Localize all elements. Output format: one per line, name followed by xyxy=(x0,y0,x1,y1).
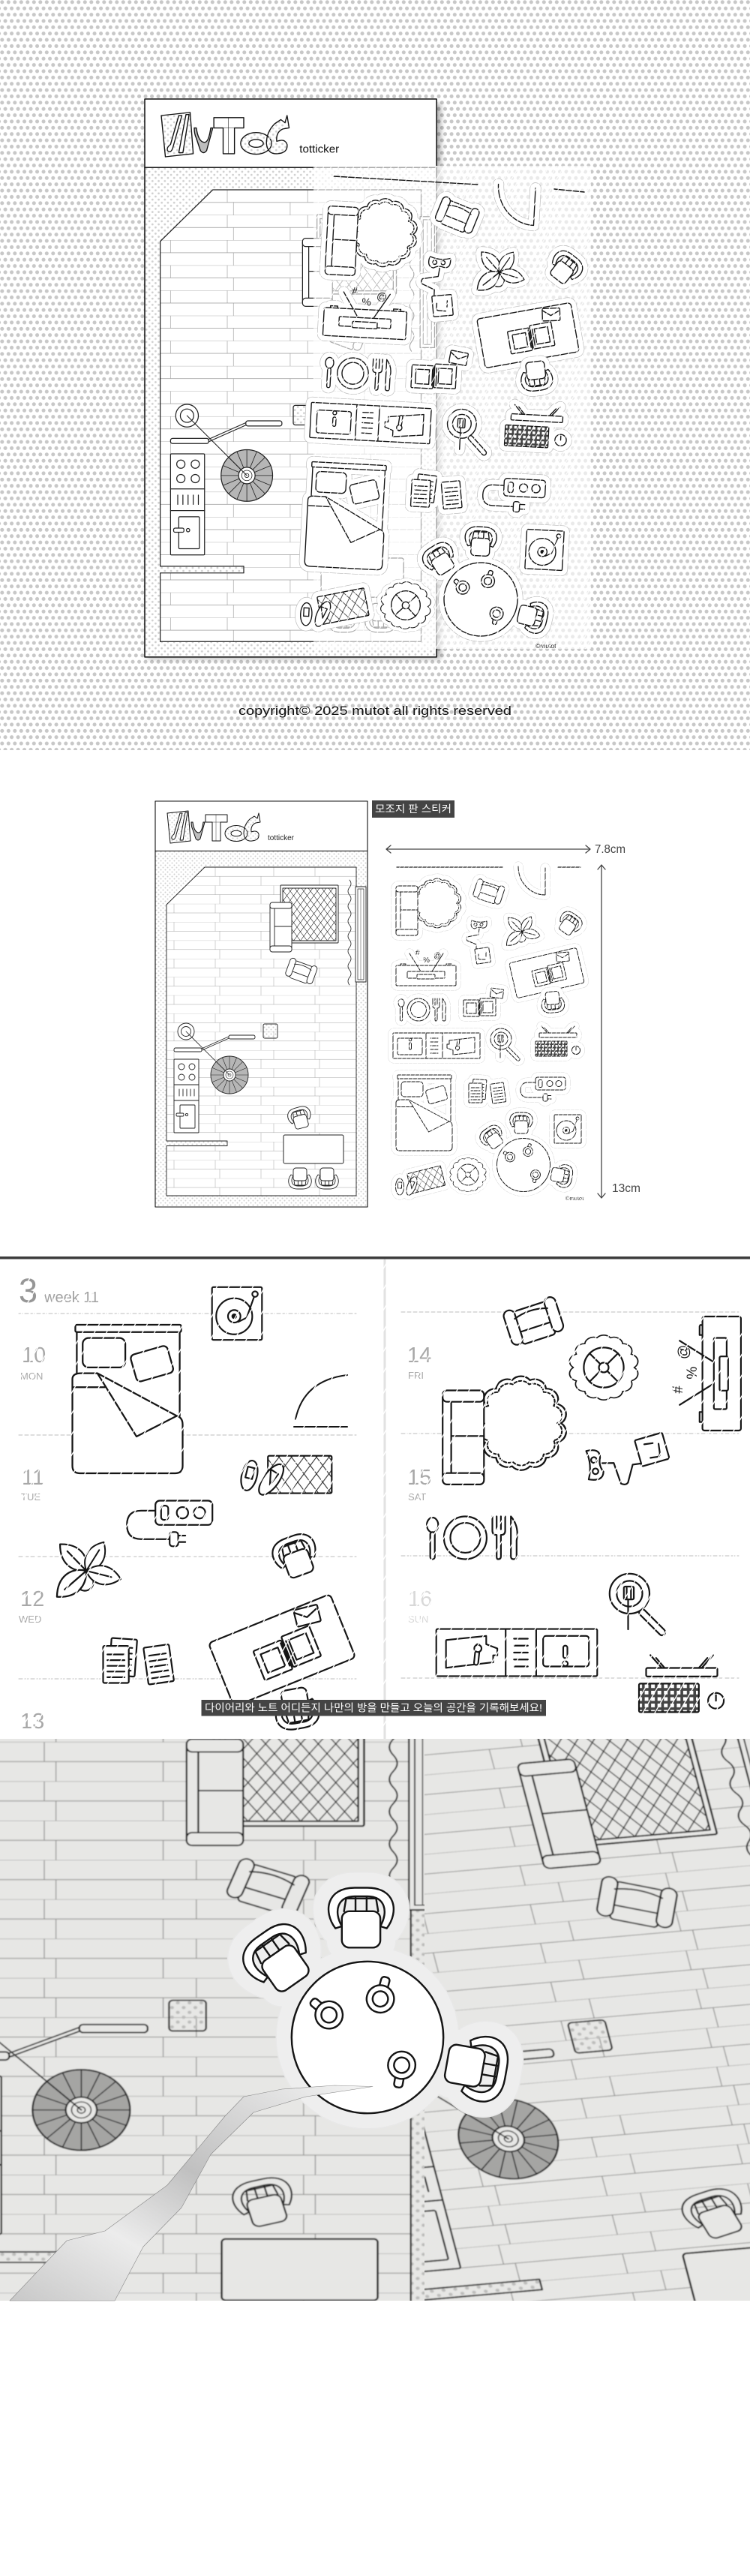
section: diary usage example xyxy=(0,1256,750,1739)
arrow: width dimension xyxy=(386,845,590,853)
section: photo of sticker and tweezers xyxy=(0,1739,750,2301)
arrow: height dimension xyxy=(598,865,605,1198)
sticker: cutlery xyxy=(427,1517,518,1559)
stickers placed in diary xyxy=(50,1287,741,1732)
sticker: kitchen counter xyxy=(393,1033,480,1058)
sticker: tv console: @ xyxy=(676,1345,692,1359)
diary date labels: TUE xyxy=(21,1491,40,1503)
sticker: wheel rug xyxy=(569,1335,638,1400)
sticker: tv console: # xyxy=(352,285,358,297)
sticker: desk chair xyxy=(272,1686,321,1732)
diary date labels: week 11 xyxy=(44,1290,99,1306)
clear film hatch xyxy=(314,166,591,649)
sticker: bed xyxy=(304,461,388,570)
sticker: controller and tablet xyxy=(419,256,456,318)
heading label: paper sticker: 모조지 판 스티커 xyxy=(375,803,452,815)
sticker: round table set held by tweezers xyxy=(235,1887,512,2113)
sticker: plant xyxy=(472,246,527,297)
center fold xyxy=(384,1260,386,1739)
sticker: small chair xyxy=(544,247,586,289)
sticker: tv console: @ xyxy=(434,952,441,960)
width label: 7.8cm xyxy=(595,843,626,856)
diary date labels: 11 xyxy=(22,1466,44,1490)
sticker: desk chair xyxy=(541,991,565,1013)
panel: backing sheet floor plan: totticker xyxy=(299,143,339,156)
sticker: tv console: % xyxy=(423,956,430,965)
sticker: tv console: % xyxy=(685,1367,700,1380)
diary date labels: 15 xyxy=(407,1466,431,1490)
sticker: desk with book xyxy=(509,947,584,998)
sticker: door xyxy=(518,866,545,895)
diary date labels: 12 xyxy=(20,1587,44,1611)
sticker: small chair xyxy=(554,908,585,938)
sticker: tv console: % xyxy=(362,296,371,308)
sticker: door xyxy=(294,1375,347,1427)
sticker: round table set xyxy=(477,1112,574,1191)
sticker: tv console xyxy=(322,284,408,340)
panel: backing sheet floor plan xyxy=(145,99,436,657)
diary date labels: SUN xyxy=(408,1614,428,1625)
sticker: keyboard and clock xyxy=(639,1655,724,1712)
sticker: tv console: @ xyxy=(376,291,388,302)
section: dotted product hero xyxy=(0,0,750,750)
panel: transparent sticker film xyxy=(314,166,591,649)
sticker: desk with book xyxy=(477,302,579,368)
caption bar: 다이어리와 노트 어디든지 나만의 방을 만들고 오늘의 공간을 기록해보세요! xyxy=(205,1701,542,1713)
sticker sheet: paper version xyxy=(393,866,585,1196)
diary date labels: 10 xyxy=(22,1344,46,1368)
sticker: round table set xyxy=(415,524,554,640)
sticker: sofa and rug xyxy=(325,196,418,279)
copyright line: copyright© 2025 mutot all rights reserved xyxy=(238,704,512,718)
photo tone xyxy=(0,1739,750,2301)
sticker: power strip xyxy=(127,1500,212,1546)
sticker: rug and slippers xyxy=(238,1436,340,1514)
background dot pattern xyxy=(0,0,750,750)
diary date labels: SAT xyxy=(408,1491,426,1503)
sticker: wheel rug xyxy=(380,581,432,630)
sticker: book xyxy=(411,348,469,390)
sticker: armchair xyxy=(434,196,481,236)
diary date labels: 13 xyxy=(20,1710,44,1734)
sticker: kitchen counter xyxy=(310,402,431,444)
sticker: keyboard and clock xyxy=(536,1026,580,1056)
sticker: wheel rug xyxy=(450,1157,486,1192)
height label: 13cm xyxy=(612,1182,640,1195)
sticker: armchair xyxy=(502,1296,566,1347)
sticker credit: ©mutot xyxy=(536,642,556,650)
sticker: bed xyxy=(396,1075,452,1151)
diary date labels: 14 xyxy=(407,1344,431,1368)
sticker: door xyxy=(496,185,536,225)
sticker: tv console: # xyxy=(670,1386,686,1394)
sticker: book xyxy=(464,988,504,1016)
diary date labels: 16 xyxy=(408,1587,432,1611)
diary date labels: FRI xyxy=(408,1370,424,1381)
sticker: turntable xyxy=(525,530,564,570)
sticker credit: ©mutot xyxy=(566,1195,584,1202)
sheet shadow xyxy=(147,104,441,659)
sticker: bed xyxy=(73,1325,183,1473)
heading label: paper sticker xyxy=(372,800,454,818)
sticker: sofa and rug xyxy=(442,1377,566,1485)
sticker: controller and tablet xyxy=(584,1432,672,1489)
sticker: armchair xyxy=(472,878,506,905)
sticker: desk with book xyxy=(208,1594,356,1707)
wall lines xyxy=(397,866,580,868)
sticker: chair xyxy=(268,1530,323,1582)
sticker: pan xyxy=(490,1028,520,1061)
diary dotted ruled lines xyxy=(19,1312,739,1679)
diary sticker hatch xyxy=(0,1260,750,1739)
paper sticker hatch xyxy=(390,859,592,1208)
sticker: tv console: # xyxy=(416,949,420,957)
sticker: sofa and rug xyxy=(396,878,461,935)
sticker: pan xyxy=(610,1574,667,1637)
sticker: turntable xyxy=(554,1115,581,1143)
sticker: rug and slippers xyxy=(396,1166,446,1196)
sticker: rug and slippers xyxy=(300,584,370,631)
diary date labels: 3 xyxy=(19,1271,38,1310)
top divider rule xyxy=(0,1256,750,1259)
sticker: controller and tablet xyxy=(466,920,490,964)
sticker: plant xyxy=(502,914,542,949)
sticker sheet: clear version xyxy=(300,176,586,640)
sticker: power strip xyxy=(520,1077,566,1101)
diary date labels xyxy=(19,1271,432,1734)
wall lines xyxy=(334,176,584,192)
sticker: cutlery xyxy=(324,356,392,391)
sticker: papers xyxy=(469,1079,506,1103)
tweezers xyxy=(10,2085,373,2301)
panel: backing sheet floor plan xyxy=(155,801,368,1207)
diary date labels: WED xyxy=(19,1614,41,1625)
sticker: plant xyxy=(50,1536,123,1603)
section: paper sticker spec xyxy=(155,800,640,1208)
sticker: tv console xyxy=(670,1317,741,1431)
sticker: pan xyxy=(446,409,490,456)
sticker: papers xyxy=(104,1638,174,1685)
photo: right angled floor plan xyxy=(424,1739,750,2301)
sticker: cutlery xyxy=(398,998,446,1021)
sticker: tv console xyxy=(396,949,456,986)
diary date labels: MON xyxy=(20,1371,43,1382)
photo: left flat floor plan xyxy=(0,1739,424,2301)
sticker: papers xyxy=(410,473,464,510)
sticker: power strip xyxy=(482,477,546,513)
sticker: turntable xyxy=(212,1287,262,1340)
sticker: kitchen counter xyxy=(436,1629,597,1676)
sticker: desk chair xyxy=(519,360,554,392)
panel: backing sheet floor plan: totticker xyxy=(268,834,295,842)
sticker: keyboard and clock xyxy=(505,404,568,449)
